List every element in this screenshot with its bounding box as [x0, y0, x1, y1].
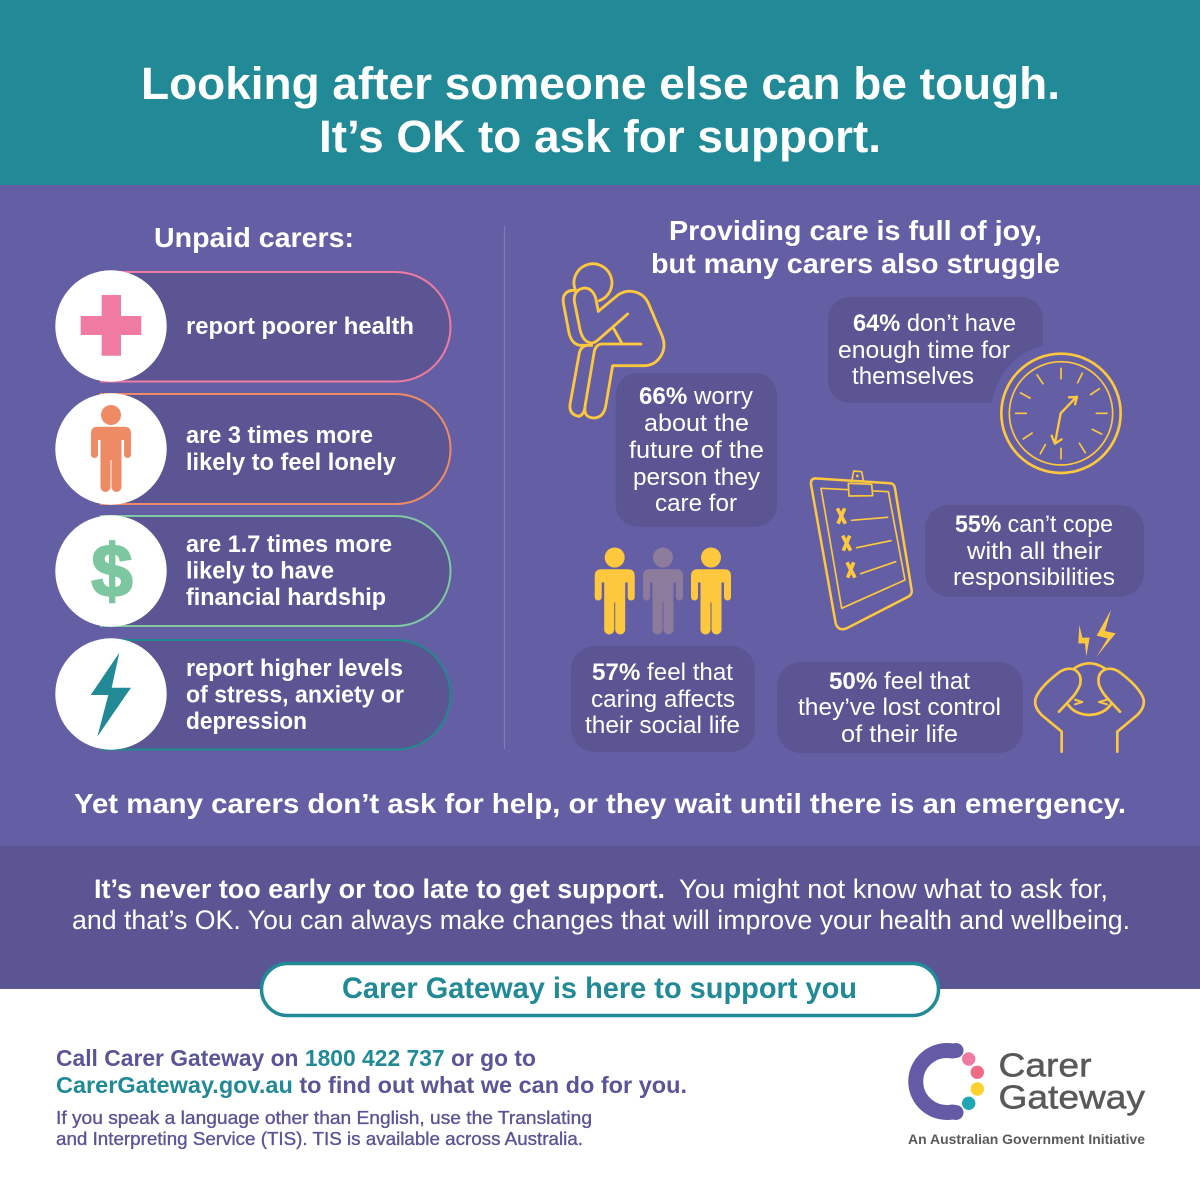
stat: 66 percent	[616, 373, 777, 527]
stat: 66 percent: care for	[655, 490, 737, 517]
text: stress: of stress, anxiety or	[186, 682, 404, 708]
stat: 66 percent: about the	[644, 410, 749, 437]
text: translating service	[56, 1107, 592, 1149]
text: poorer health: report poorer health	[186, 313, 414, 340]
stat: 64 percent: themselves	[852, 363, 974, 390]
icon: clipboard	[811, 471, 912, 629]
icon: medical cross	[81, 295, 141, 356]
contact details	[56, 1045, 687, 1098]
heading: providing care: Providing care is full of joy,	[669, 215, 1042, 246]
stat: 50 percent	[777, 662, 1023, 753]
text: stress: report higher levels	[186, 655, 403, 682]
icon: stressed head	[1035, 610, 1144, 752]
stat: 64 percent	[828, 297, 1131, 483]
text: never too early: and that’s OK. You can always make changes that will improve your health and wellbeing.	[72, 905, 1130, 935]
stat: 55 percent: responsibilities	[953, 564, 1115, 591]
title	[141, 58, 1060, 162]
stat: 64 percent: enough time for	[838, 337, 1010, 364]
icon: clock	[1001, 354, 1121, 473]
item: poorer health	[55, 270, 450, 382]
stat: 64 percent: 64% don’t have	[853, 310, 1016, 337]
statement: yet many carers: Yet many carers don’t ask for help, or they wait until there is an emergency.	[74, 788, 1126, 819]
contact details: CarerGateway.gov.au to find out what we can do for you.	[56, 1072, 687, 1098]
text: translating service: and Interpreting Service (TIS). TIS is available across Australia.	[56, 1128, 583, 1149]
stat: 57 percent: their social life	[585, 712, 740, 739]
stat: 55 percent: with all their	[966, 538, 1102, 565]
stat: 55 percent: 55% can’t cope	[955, 511, 1113, 538]
text: financial hardship: financial hardship	[186, 584, 386, 611]
text: never too early	[72, 874, 1130, 935]
button: carer gateway is here	[262, 964, 938, 1016]
stat: 66 percent: person they	[633, 464, 761, 491]
text: lonely	[186, 422, 396, 476]
logo: carer gateway: Gateway	[998, 1078, 1146, 1116]
stat: 57 percent	[571, 646, 755, 752]
panel: carers struggle	[563, 215, 1144, 753]
title: It’s OK to ask for support.	[319, 111, 881, 162]
heading: providing care	[651, 215, 1060, 279]
logo: carer gateway: An Australian Government Initiative	[908, 1132, 1146, 1147]
icon: person	[91, 405, 131, 492]
text: never too early: You might not know what to ask for,	[679, 874, 1108, 904]
icon: three people	[595, 548, 731, 634]
heading: providing care: but many carers also struggle	[651, 248, 1060, 279]
contact details: Call Carer Gateway on 1800 422 737 or go to	[56, 1045, 536, 1071]
icon: lightning bolt	[91, 653, 131, 737]
stat: 66 percent: future of the	[629, 437, 764, 464]
stat: 57 percent: 57% feel that	[592, 659, 733, 686]
stat: 55 percent	[925, 505, 1144, 597]
header banner	[0, 0, 1200, 185]
heading: unpaid carers: Unpaid carers:	[154, 222, 354, 253]
stat: 50 percent: they’ve lost control	[798, 694, 1001, 721]
main purple background	[0, 185, 1200, 847]
text: translating service: If you speak a language other than English, use the Translating	[56, 1107, 592, 1128]
item: lonely	[55, 393, 450, 505]
text: stress	[186, 655, 404, 735]
text: stress: depression	[186, 708, 307, 735]
item: financial hardship	[55, 515, 450, 627]
title: Looking after someone else can be tough.	[141, 58, 1060, 109]
panel: never too early band	[0, 846, 1200, 989]
text: lonely: likely to feel lonely	[186, 449, 396, 476]
panel: unpaid carers	[55, 222, 450, 750]
logo: carer gateway	[908, 1047, 1146, 1147]
text: never too early: It’s never too early or too late to get support.	[94, 874, 665, 904]
icon: sitting figure	[563, 264, 664, 418]
icon: dollar sign: $	[92, 530, 132, 612]
text: financial hardship: likely to have	[186, 558, 334, 584]
text: lonely: are 3 times more	[186, 422, 373, 449]
text: financial hardship: are 1.7 times more	[186, 531, 392, 558]
stat: 57 percent: caring affects	[591, 686, 735, 713]
stat: 50 percent: of their life	[841, 721, 958, 748]
logo: carer gateway: Carer	[998, 1047, 1092, 1084]
item: stress	[55, 638, 450, 750]
text: financial hardship	[186, 531, 392, 611]
button: carer gateway is here: Carer Gateway is here to support you	[342, 972, 857, 1005]
stat: 66 percent: 66% worry	[639, 383, 754, 410]
stat: 50 percent: 50% feel that	[829, 668, 970, 695]
